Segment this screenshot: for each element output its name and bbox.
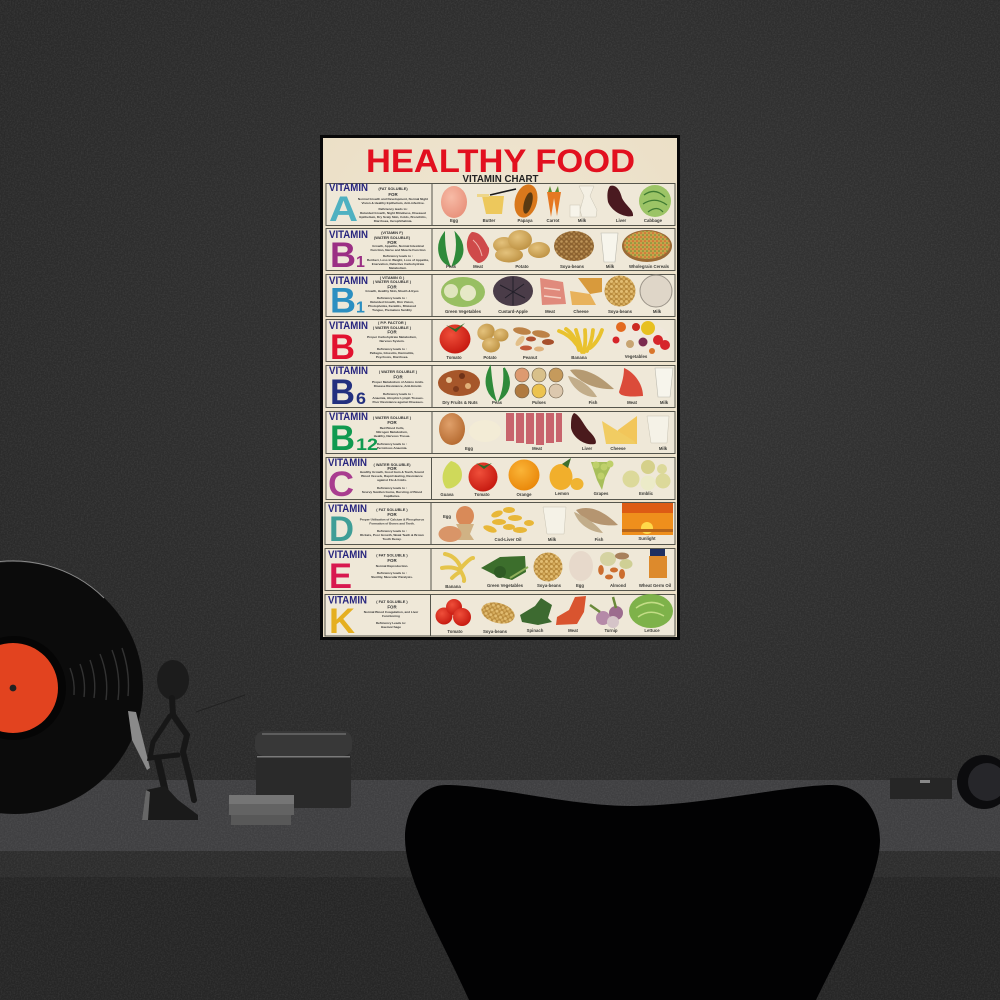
- panel: vitamin E: VITAMIN: [328, 549, 367, 561]
- panel: vitamin B1 (G): FOR: [387, 284, 397, 290]
- panel: vitamin B1 (G): B: [330, 282, 356, 320]
- food: pulses: Pulses: [532, 400, 547, 405]
- panel: vitamin B1 (F): (WATER SOLUBLE): [374, 235, 411, 240]
- panel: vitamin K: VITAMIN: [328, 594, 367, 606]
- panel: vitamin B6: Deficiency leads to :: [383, 392, 413, 396]
- food: vegetables: Vegetables: [625, 354, 648, 359]
- food: lemon: Lemon: [555, 491, 569, 496]
- food: milk: [601, 233, 618, 269]
- panel: vitamin E: Sterility, Muscular Paralysis.: [371, 575, 413, 579]
- shelf front edge: [0, 851, 1000, 877]
- panel: vitamin B12: B: [330, 419, 355, 458]
- food: milk: Milk: [660, 400, 669, 405]
- panel: vitamin D: Tooth Decay.: [383, 537, 402, 541]
- food: custard-apple: [493, 276, 533, 314]
- panel: vitamin K: Deficiency Leads to:: [376, 621, 406, 625]
- food: papaya: [511, 182, 541, 223]
- panel: vitamin B12: 12: [356, 435, 378, 454]
- panel: vitamin C: Deficiency leads to :: [377, 486, 407, 490]
- food: banana: Banana: [445, 584, 461, 589]
- panel: vitamin K: K: [329, 602, 355, 641]
- panel: vitamin B1 (G): 1: [356, 300, 365, 316]
- food: peas: [487, 368, 509, 405]
- food: dry fruits and nuts: [438, 370, 480, 405]
- food: soya-beans: Soya-beans: [537, 583, 562, 588]
- food: sunlight: Sunlight: [638, 536, 656, 541]
- panel: vitamin B12: [326, 411, 675, 458]
- panel: vitamin B12: ( WATER SOLUBLE ): [373, 415, 412, 420]
- panel: vitamin B1 (F): Enervation, Defective Carbohydrate: [372, 262, 424, 266]
- food: orange: Orange: [516, 492, 532, 497]
- panel: vitamin B (PP): Psychosis, Diarrhoea.: [376, 355, 408, 359]
- panel: vitamin B1 (F): Growth, Appetite, Normal Intestinal: [372, 244, 424, 248]
- food: tomato: [436, 599, 471, 634]
- food: spinach: [520, 598, 552, 633]
- panel: vitamin C: ( WATER SOLUBLE): [373, 462, 411, 467]
- panel: vitamin K: Normal Blood Coagulation, and Liver: [364, 610, 419, 614]
- food: cabbage: Cabbage: [644, 218, 663, 223]
- food: egg: [569, 551, 593, 588]
- panel: vitamin A: Normal Growth and Development, Normal Night: [358, 197, 428, 201]
- panel: vitamin B1 (F): [326, 228, 675, 275]
- food: almond: [598, 552, 632, 588]
- panel: vitamin K: [325, 594, 675, 641]
- food: milk: Milk: [653, 309, 662, 314]
- panel: vitamin B6: [326, 365, 675, 412]
- panel: vitamin B6: Anaemia, Atrophic Lymph Tissues.: [372, 396, 424, 400]
- food: fish: Fish: [589, 400, 598, 405]
- food: milk: [655, 368, 673, 405]
- panel: vitamin A: FOR: [388, 192, 398, 197]
- food: almond: Almond: [610, 583, 626, 588]
- panel: vitamin B12: Pernicious Anaemia.: [377, 446, 407, 450]
- panel: vitamin E: ( FAT SOLUBLE ): [376, 552, 408, 558]
- panel: vitamin B1 (F): Function, Nerve and Muscle Function: [370, 248, 426, 252]
- food: cheese: Cheese: [610, 446, 626, 451]
- figurine: [128, 660, 245, 820]
- panel: vitamin B6: Proper Metabolism of Amino Acids.: [372, 380, 424, 384]
- panel: vitamin D: [325, 502, 675, 549]
- food: custard-apple: Custard-Apple: [498, 309, 528, 314]
- food: peanut: [513, 326, 554, 360]
- food: green vegetables: Green Vegetables: [445, 309, 482, 314]
- food: grapes: Grapes: [594, 491, 609, 496]
- food: dry fruits and nuts: Dry Fruits & Nuts: [442, 400, 478, 405]
- panel: vitamin B (PP): VITAMIN: [329, 320, 368, 332]
- food: guava: [440, 461, 462, 497]
- food: emblic: [622, 460, 670, 496]
- panel: vitamin D: Rickets, Poor Growth, Weak Teeth & Brown: [360, 533, 424, 537]
- panel: vitamin B6: Disease Resistance, Anti-Emetic.: [374, 384, 422, 388]
- food: soya-beans: Soya-beans: [560, 264, 585, 269]
- panel: vitamin A: Retarded Growth, Night Blindness, Diseased: [360, 211, 426, 215]
- food: potato: Potato: [515, 264, 529, 269]
- food: soya-beans: [534, 552, 562, 588]
- food: butter: [477, 189, 516, 223]
- food: sunlight: [622, 503, 673, 541]
- panel: vitamin D: Proper Utilisation of Calcium & Phosphorus: [360, 518, 425, 522]
- panel: vitamin B (PP): Nervous System.: [379, 339, 405, 343]
- shelf top: [0, 780, 1000, 851]
- panel: vitamin K: ( FAT SOLUBLE ): [376, 599, 408, 604]
- food: milk: Milk: [659, 446, 668, 451]
- panel: vitamin B1 (F): 1: [356, 254, 365, 271]
- food: milk: [640, 275, 672, 314]
- food: meat: [556, 596, 586, 633]
- food: tomato: [440, 323, 470, 360]
- food: milk: Milk: [548, 537, 557, 542]
- panel: vitamin D: ( FAT SOLUBLE ): [376, 507, 408, 512]
- food: egg: Egg: [576, 583, 584, 588]
- panel: vitamin B1 (G): Tongue, Premature Senility: [372, 308, 412, 312]
- panel: vitamin B1 (F): Deficiency leads to :: [383, 254, 413, 258]
- food: peas: [439, 234, 462, 269]
- food: lettuce: Lettuce: [644, 628, 660, 633]
- food: soya-beans: [604, 276, 636, 314]
- panel: vitamin C: VITAMIN: [328, 457, 367, 469]
- panel: vitamin D: VITAMIN: [328, 503, 367, 515]
- eraser block: [229, 795, 294, 825]
- wall background: [0, 0, 1000, 785]
- panel: vitamin B1 (G): Retarded Growth, Dim Vision,: [370, 300, 414, 304]
- panel: vitamin B (PP): [326, 320, 675, 367]
- food: soya-beans: [479, 599, 517, 634]
- panel: vitamin C: Scurvy Swollen Gums, Bursting of Blood: [362, 490, 422, 494]
- panel: vitamin A: [326, 182, 675, 229]
- food: cod-liver oil: [482, 507, 534, 542]
- food: milk: Milk: [578, 218, 587, 223]
- food: cheese: Cheese: [573, 309, 589, 314]
- panel: vitamin B (PP): Pellagra, Glossitis, Dermatitis,: [370, 351, 414, 355]
- food: lettuce: [629, 594, 673, 633]
- food: vegetables: [609, 321, 670, 359]
- panel: vitamin B12: Red Blood Cells,: [380, 426, 404, 430]
- panel: vitamin E: Normal Reproduction.: [376, 564, 408, 568]
- panel: vitamin A: Deficiency leads to:: [378, 207, 408, 211]
- panel: vitamin C: Blood Vessels, Rapid Healing, Resistance: [361, 474, 423, 478]
- food: pulses: [515, 368, 563, 405]
- panel: vitamin D: D: [329, 510, 354, 549]
- panel: vitamin C: against Flu & Colds.: [377, 478, 407, 482]
- food: meat: [619, 368, 643, 405]
- food: cabbage: [639, 185, 671, 223]
- food: liver: Liver: [582, 446, 592, 451]
- food: egg: Egg: [450, 218, 458, 223]
- panel: vitamin D: Formation of Bones and Teeth.: [369, 522, 415, 526]
- panel: vitamin K: FOR: [387, 604, 397, 610]
- panel: vitamin B12: Nitrogen Metabolism,: [376, 430, 408, 434]
- food: milk: [647, 416, 669, 451]
- food: peas: Peas: [446, 264, 457, 269]
- food: liver: Liver: [616, 218, 626, 223]
- panel: vitamin B12: Deficiency leads to :: [377, 442, 407, 446]
- panel: vitamin B (PP): Deficiency leads to :: [377, 347, 407, 351]
- panel: vitamin B1 (F): VITAMIN: [329, 229, 368, 241]
- poster frame: [320, 135, 680, 640]
- food: soya-beans: Soya-beans: [608, 309, 633, 314]
- food: meat: Meat: [568, 628, 578, 633]
- food: banana: Banana: [571, 355, 587, 360]
- food: tomato: Tomato: [474, 492, 490, 497]
- food: meat: Meat: [532, 446, 542, 451]
- food: liver: [607, 186, 633, 223]
- panel: vitamin C: FOR: [387, 466, 397, 471]
- food: orange: [508, 460, 540, 497]
- panel: vitamin E: [325, 548, 675, 596]
- food: peanut: Peanut: [523, 355, 538, 360]
- food: green vegetables: [481, 556, 528, 588]
- panel: vitamin B (PP): B: [330, 328, 355, 367]
- panel: vitamin B6: ( WATER SOLUBLE ): [379, 369, 418, 374]
- panel: vitamin B6: VITAMIN: [329, 365, 368, 377]
- panel: vitamin C: Capillaries.: [384, 494, 400, 498]
- panel: vitamin B6: B: [330, 373, 355, 412]
- panel: vitamin A: VITAMIN: [329, 182, 368, 194]
- food: milk: Milk: [606, 264, 615, 269]
- chair: [405, 785, 880, 1000]
- food: banana: [559, 329, 602, 360]
- panel: vitamin A: A: [329, 190, 358, 229]
- food: meat: Meat: [627, 400, 637, 405]
- food: carrot: [547, 186, 561, 223]
- panel: vitamin K: Functioning: [382, 614, 400, 618]
- food: grapes: [591, 460, 614, 496]
- panel: vitamin B1 (F): FOR: [387, 240, 397, 245]
- food: potato: Potato: [483, 355, 497, 360]
- subtitle: VITAMIN CHART: [462, 174, 538, 185]
- panel: vitamin B1 (G): ( WATER SOLUBLE ): [373, 279, 412, 284]
- food: potato: [474, 320, 508, 360]
- food: meat: [540, 278, 566, 314]
- food: wholegrain cereals: Wholegrain Cereals: [629, 264, 670, 269]
- poster paper: [323, 138, 677, 637]
- panel: vitamin A: (FAT SOLUBLE): [378, 186, 408, 191]
- food: emblic: Emblic: [639, 491, 654, 496]
- title: HEALTHY FOOD: [366, 143, 635, 179]
- food: egg: [438, 506, 474, 542]
- food: egg: [441, 186, 467, 223]
- panel: vitamin B6: FOR: [393, 374, 403, 380]
- food: cod-liver oil: Cod-Liver Oil: [495, 537, 521, 542]
- panel: vitamin K: Haemorrhage: [381, 625, 401, 629]
- food: spinach: Spinach: [527, 628, 544, 633]
- panel: vitamin A: Vision & Healthy Epithelium, Anti-infective.: [361, 201, 425, 205]
- food: green vegetables: Green Vegetables: [487, 583, 524, 588]
- panel: vitamin C: Healthy Growth, Good Gum & Teeth, Sound: [360, 470, 424, 474]
- panel: vitamin A: Diarrhoea, Xerophthalmia.: [374, 219, 412, 223]
- panel: vitamin C: [326, 457, 675, 504]
- food: fish: [574, 508, 618, 542]
- food: egg: [439, 413, 501, 451]
- panel: vitamin D: Deficiency leads to :: [377, 529, 407, 533]
- vinyl record: [0, 561, 143, 814]
- food: meat: [467, 232, 489, 269]
- food: cheese: [602, 416, 637, 451]
- panel: vitamin E: E: [329, 557, 352, 596]
- food: banana: [442, 554, 473, 589]
- jar: [255, 731, 352, 808]
- panel: vitamin B12: Healthy, Nervous Tissue.: [374, 434, 410, 438]
- panel: vitamin B1 (G): Deficiency leads to :: [377, 296, 407, 300]
- food: lemon: [550, 458, 584, 496]
- food: cheese: [570, 278, 602, 314]
- food: butter: Butter: [483, 218, 496, 223]
- panel: vitamin B12: FOR: [387, 420, 397, 425]
- panel: vitamin E: FOR: [387, 558, 397, 563]
- panel: vitamin B1 (G): [326, 274, 675, 320]
- panel: vitamin C: C: [328, 465, 354, 504]
- panel: vitamin B1 (F): B: [330, 236, 356, 275]
- panel: vitamin E: Deficiency leads to :: [377, 571, 407, 575]
- food: liver: [571, 413, 596, 451]
- food: milk: [543, 507, 566, 542]
- food: tomato: [468, 462, 498, 497]
- food: peas: Peas: [492, 400, 503, 405]
- panel: vitamin B (PP): FOR: [387, 330, 397, 334]
- panel: vitamin B1 (G): VITAMIN: [329, 275, 368, 287]
- panel: vitamin B6: 6: [356, 389, 366, 408]
- food: papaya: Papaya: [517, 218, 533, 223]
- panel: vitamin D: FOR: [387, 512, 397, 517]
- food: turnip: Turnip: [604, 628, 618, 633]
- panel: vitamin B1 (F): Beriberi, Loss in Weight, Loss of Appetite,: [367, 258, 429, 262]
- panel: vitamin A: Epithelium, Dry Scaly Skin, Colds, Bronchitis,: [359, 215, 427, 219]
- food: fish: Fish: [595, 537, 604, 542]
- panel: vitamin B6: Poor Resistance against Diseases.: [372, 400, 424, 404]
- panel: vitamin B (PP): ( WATER SOLUBLE ): [373, 325, 412, 330]
- food: fish: [568, 369, 614, 405]
- panel: vitamin B (PP): Proper Carbohydrate Metabolism,: [367, 335, 417, 339]
- food: meat: Meat: [473, 264, 483, 269]
- food: wholegrain cereals: [622, 230, 672, 269]
- food: soya-beans: Soya-beans: [483, 629, 508, 634]
- lower wall: [0, 877, 1000, 1000]
- panel: vitamin B1 (G): ( VITAMIN G ): [380, 275, 405, 280]
- food: potato: [493, 230, 550, 269]
- food: guava: Guava: [440, 492, 454, 497]
- food: soya-beans: [554, 231, 594, 269]
- food: meat: [506, 413, 562, 451]
- food: turnip: [590, 597, 623, 633]
- food: tomato: Tomato: [447, 629, 463, 634]
- food: tomato: Tomato: [446, 355, 462, 360]
- poster: [320, 135, 680, 641]
- food: egg: Egg: [465, 446, 473, 451]
- panel: vitamin B1 (G): Photophobia, Keratitis, Blistered: [368, 304, 416, 308]
- panel: vitamin B12: VITAMIN: [329, 411, 368, 423]
- food: egg: Egg: [443, 514, 451, 519]
- panel: vitamin B1 (F): (VITAMIN F): [381, 230, 404, 235]
- food: meat: Meat: [545, 309, 555, 314]
- food: wheat germ oil: Wheat Germ Oil: [639, 583, 671, 588]
- food: carrot: Carrot: [547, 218, 560, 223]
- panel: vitamin B1 (G): Growth, Healthy Skin, Mouth & Eyes: [365, 289, 419, 293]
- panel: vitamin B1 (F): Metabolism.: [389, 266, 407, 270]
- headphones: [890, 755, 1000, 809]
- food: wheat germ oil: [639, 549, 671, 588]
- food: green vegetables: [441, 277, 485, 314]
- panel: vitamin B (PP): ( P.P. FACTOR ): [378, 320, 407, 325]
- food: milk: [570, 186, 597, 223]
